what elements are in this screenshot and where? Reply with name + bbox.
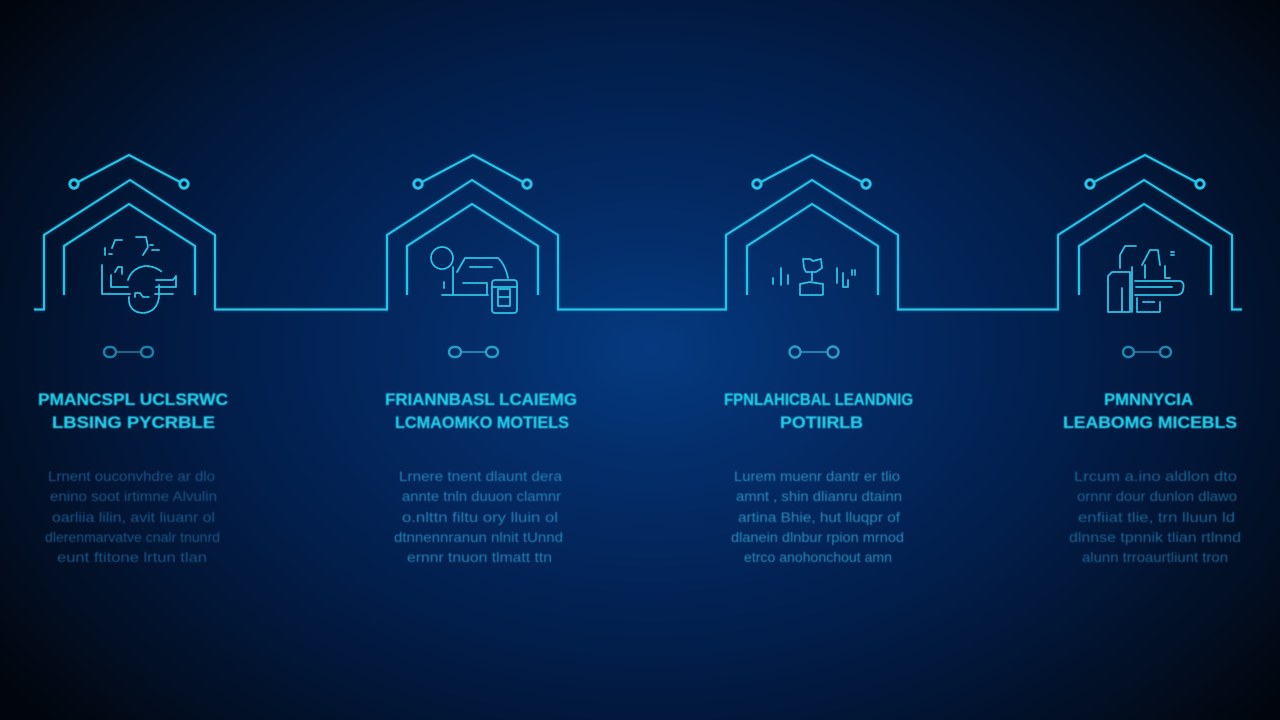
heading: FRIANNBASL LCAIEMG xyxy=(385,391,577,409)
top connector with nodes xyxy=(1086,155,1204,188)
heading xyxy=(1063,391,1237,432)
heading xyxy=(724,391,913,432)
link icon xyxy=(449,347,498,357)
body text: artina Bhie, hut lluqpr of xyxy=(738,509,900,525)
body text xyxy=(45,468,220,565)
link icon xyxy=(1123,347,1171,357)
heading: POTIIRLB xyxy=(780,414,863,432)
body text: dlerenmarvatve cnalr tnunrd xyxy=(45,529,220,545)
panel: step 4 xyxy=(1063,155,1241,565)
body text: dlnnse tpnnik tlian rtlnnd xyxy=(1069,529,1241,545)
body text: alunn trroaurtliunt tron xyxy=(1082,549,1228,565)
body text: etrco anohonchout amn xyxy=(744,549,892,565)
heading: PMANCSPL UCLSRWC xyxy=(38,391,228,409)
body text: Lrnent ouconvhdre ar dlo xyxy=(48,468,215,484)
body text: enino soot irtimne Alvulin xyxy=(50,488,217,504)
body text: ernnr tnuon tlmatt ttn xyxy=(407,549,552,565)
panel: step 1 xyxy=(38,155,228,565)
heading: PMNNYCIA xyxy=(1104,391,1193,409)
body text: oarliia lilin, avit liuanr ol xyxy=(52,509,215,525)
body text: o.nlttn filtu ory lluin ol xyxy=(402,509,558,525)
panel: step 3 xyxy=(724,155,913,565)
body text: Lurem muenr dantr er tlio xyxy=(734,468,900,484)
top connector with nodes xyxy=(753,155,870,188)
body text: Lrnere tnent dlaunt dera xyxy=(399,468,562,484)
heading: LCMAOMKO MOTIELS xyxy=(395,414,569,432)
icon: person with bars xyxy=(773,259,855,295)
panel: step 2 xyxy=(385,155,577,565)
body text: Lrcum a.ino aldlon dto xyxy=(1074,468,1237,484)
body text: eunt ftitone lrtun tlan xyxy=(57,549,207,565)
link icon xyxy=(790,346,838,358)
heading: LBSING PYCRBLE xyxy=(52,414,215,432)
heading xyxy=(38,391,228,432)
body text: enfiiat tlie, trn lluun ld xyxy=(1078,509,1235,525)
icon: people with laptop xyxy=(1108,246,1184,312)
circuit timeline line with house outlines xyxy=(34,180,1242,310)
heading: FPNLAHICBAL LEANDNIG xyxy=(724,391,913,409)
inner house outline xyxy=(407,204,538,295)
heading: LEABOMG MICEBLS xyxy=(1063,414,1237,432)
body text: amnt , shin dlianru dtainn xyxy=(736,488,902,504)
body text: ornnr dour dunlon dlawo xyxy=(1077,488,1237,504)
inner house outline xyxy=(747,204,878,295)
heading xyxy=(385,391,577,432)
top connector with nodes xyxy=(70,155,188,188)
body text: dlanein dlnbur rpion mrnod xyxy=(731,529,904,545)
icon: vehicle and document xyxy=(431,247,517,313)
inner house outline xyxy=(64,204,195,295)
inner house outline xyxy=(1079,204,1211,295)
body text xyxy=(394,468,563,565)
icon: financial gear xyxy=(102,237,176,313)
body text xyxy=(1069,468,1241,565)
body text xyxy=(731,468,904,565)
body text: dtnnennranun nlnit tUnnd xyxy=(394,529,563,545)
top connector with nodes xyxy=(414,155,531,188)
link icon xyxy=(104,347,153,357)
body text: annte tnln duuon clamnr xyxy=(402,488,561,504)
